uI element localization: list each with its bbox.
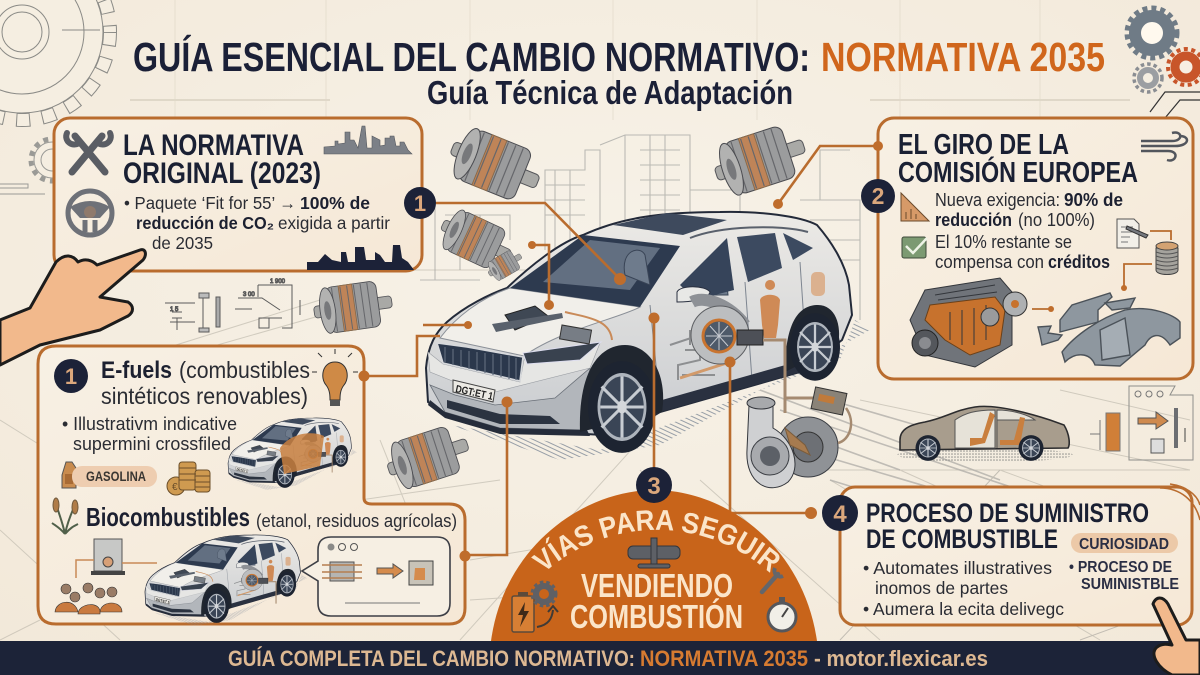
engine illustration (910, 278, 1027, 367)
hood (440, 288, 640, 356)
part: motor top right (708, 120, 812, 200)
panel: E-fuels y biocombustibles (38, 346, 470, 626)
icon: fuel jug (62, 462, 76, 488)
badge 1 on panel: 1 (414, 191, 426, 216)
sill (660, 362, 800, 412)
footer band: NORMATIVA 2035 (640, 646, 808, 671)
text: bullet: exigida a partir (278, 213, 390, 233)
schematic diagram (165, 279, 300, 332)
badge 2: 2 (872, 183, 884, 209)
badge 2 (861, 179, 895, 213)
text: left bullets: inomos de partes (875, 578, 1008, 598)
icon: gear (532, 582, 556, 606)
icon: battery (512, 592, 534, 632)
windscreen (510, 235, 680, 307)
schematic diagram: 3 00 (243, 292, 255, 298)
panel: La normativa original: ORIGINAL (2023) (123, 157, 321, 190)
roof panel (613, 213, 727, 235)
title: GUÍA ESENCIAL DEL CAMBIO NORMATIVO: (133, 34, 810, 80)
panel: Proceso de suministro de combustible: DE COMBUSTIBLE (866, 524, 1058, 554)
side mirror (677, 287, 710, 302)
label: gasolina pill: GASOLINA (86, 469, 146, 484)
icon: grey skyline (324, 126, 412, 154)
text: bullet (124, 193, 390, 253)
heading: EL GIRO DE LA (898, 129, 1069, 161)
part: motor top centre (442, 123, 548, 207)
door mechanical schematic (670, 330, 715, 380)
icon: pointing hand bottom right (1153, 598, 1200, 675)
callout: process detail (302, 537, 450, 616)
text: bullet: de 2035 (152, 233, 213, 253)
label: gasolina pill (72, 466, 157, 487)
text: requirements: (no 100%) (1018, 210, 1095, 230)
part: motor under car (381, 421, 475, 493)
schematic top-right lower (1090, 386, 1193, 460)
turbocharger illustration (747, 387, 851, 488)
connector dots on car (464, 199, 783, 408)
text: e-fuels bullet (62, 414, 237, 454)
rear door window (737, 233, 782, 282)
text: requirements (935, 190, 1123, 272)
subtitle: Guía Técnica de Adaptación (427, 74, 793, 111)
part: motor below panel 1 (311, 279, 395, 335)
footer band (0, 641, 1200, 675)
icon: large background gear top left (0, 0, 110, 120)
text: requirements: compensa con (935, 252, 1044, 272)
panel: La normativa original (54, 118, 422, 271)
icon: coins (167, 462, 210, 495)
icon: piston connector (628, 538, 680, 568)
icon: gears top right (1127, 8, 1200, 118)
grille (437, 343, 523, 381)
icon: dark skyline (307, 245, 414, 270)
schematic diagram: 1 900 (270, 279, 286, 285)
number plate (453, 380, 495, 403)
icon: triangle ruler (901, 193, 929, 221)
heading: LA NORMATIVA (123, 129, 304, 162)
heading: e-fuels: (combustibles (179, 357, 310, 383)
panel: El giro de la Comisión Europea: COMISIÓN EUROPEA (898, 155, 1138, 189)
sedan illustration (897, 406, 1073, 462)
heading: biocombustibles: Biocombustibles (86, 502, 250, 532)
text: requirements: reducción (935, 210, 1012, 230)
badge 4 with connector dot (805, 495, 858, 531)
rear door orange emblem (811, 272, 825, 296)
text: right bullet (1069, 559, 1179, 593)
car: supermini (228, 418, 357, 490)
icon: stopwatch (768, 597, 796, 631)
text: right bullet: • PROCESO DE (1069, 559, 1172, 576)
badge 4 with connector dot: 4 (833, 501, 847, 528)
heading lines: VENDIENDO (581, 567, 733, 604)
roof rail (690, 227, 808, 238)
icon: coins: € (172, 482, 178, 493)
rear wheel arch (785, 305, 839, 372)
icon: small background gear (0, 139, 73, 194)
icon: wrench (762, 568, 783, 592)
headlight (523, 342, 601, 364)
heading: e-fuels (101, 357, 310, 409)
heading: biocombustibles (86, 502, 457, 532)
lower bumper (428, 400, 590, 436)
icon: credit coin stack (1156, 242, 1178, 274)
text: bullet: reducción de CO₂ (136, 213, 274, 233)
text: e-fuels bullet: supermini crossfiled (73, 434, 231, 454)
car: main SUV illustration (426, 212, 870, 460)
icon: crossed wrenches (66, 133, 111, 172)
text: bullet: • Paquete ‘Fit for 55’ → (124, 193, 296, 213)
badge 1: 1 (65, 364, 77, 389)
connector dots (358, 370, 370, 382)
icon: document with pen (1117, 219, 1148, 248)
panel: El giro de la Comisión Europea (861, 118, 1193, 379)
front bumper (430, 368, 590, 430)
engine control unit on hood (492, 306, 612, 344)
background city buildings (420, 135, 860, 320)
part: motor assembly left of car (434, 205, 526, 284)
door lines (650, 262, 806, 405)
badge 3: 3 (647, 473, 661, 500)
orange figure on door (760, 280, 780, 338)
heading: e-fuels: sintéticos renovables) (101, 383, 308, 409)
text: bullet: 100% de (300, 193, 370, 213)
badge 1 (54, 359, 88, 393)
icon: fuel kiosk (76, 539, 157, 578)
footer band: GUÍA COMPLETA DEL CAMBIO NORMATIVO: (228, 646, 635, 671)
front wheel arch (580, 345, 663, 432)
text: left bullets: • Aumera la ecita delivegc (863, 599, 1064, 619)
panel: vías para seguir vendiendo combustión (491, 467, 817, 641)
icon: lightbulb (312, 349, 358, 406)
turbo on car (691, 300, 785, 400)
car: crossover biofuel (145, 535, 307, 626)
text: e-fuels bullet: • Illustrativm indicative (62, 414, 237, 434)
text: left bullets: • Automates illustratives (863, 558, 1052, 578)
connector dot (873, 141, 883, 151)
badge 1 on panel (404, 187, 436, 219)
heading: biocombustibles: (etanol, residuos agrícolas) (256, 511, 457, 531)
text: right bullet: SUMINISTBLE (1081, 576, 1179, 593)
label: curiosidad pill: CURIOSIDAD (1079, 536, 1169, 553)
icon: group of people (55, 583, 122, 614)
panel: vías para seguir vendiendo combustión: COMBUSTIÓN (570, 598, 743, 635)
front side window (680, 238, 734, 300)
front wheel (588, 361, 656, 453)
schematic diagram: 1 5 (170, 307, 179, 313)
car shadow (450, 320, 870, 460)
panel: Proceso de suministro de combustible (840, 487, 1192, 625)
decorative orange wire top right of panel 4 (1160, 484, 1200, 520)
icon: check box (902, 237, 927, 258)
number plate: DGT:ET 1 (454, 383, 494, 403)
car body (426, 212, 852, 436)
car body panels illustration (1038, 293, 1180, 366)
rear quarter window (783, 233, 813, 260)
icon: wind (1141, 132, 1187, 160)
footer band: - motor.flexicar.es (814, 646, 988, 671)
icon: pointing hand left (0, 250, 145, 365)
seats (624, 250, 728, 295)
connector lines (364, 146, 878, 555)
badge 3 (636, 467, 672, 503)
text: requirements: créditos (1048, 252, 1110, 272)
text: left bullets (863, 558, 1064, 619)
heading: e-fuels: E-fuels (101, 357, 172, 384)
text: requirements: Nueva exigencia: (935, 190, 1060, 210)
text: requirements: El 10% restante se (935, 232, 1072, 252)
rear wheel (790, 313, 840, 381)
panel connectors (1032, 231, 1171, 309)
text: requirements: 90% de (1064, 190, 1123, 210)
icon: curved arrow (537, 606, 558, 627)
title: NORMATIVA 2035 (821, 34, 1105, 80)
icon: plant (52, 498, 78, 534)
arc heading: VÍAS PARA SEGUIR (531, 510, 780, 573)
icon: steering wheel (68, 191, 112, 235)
